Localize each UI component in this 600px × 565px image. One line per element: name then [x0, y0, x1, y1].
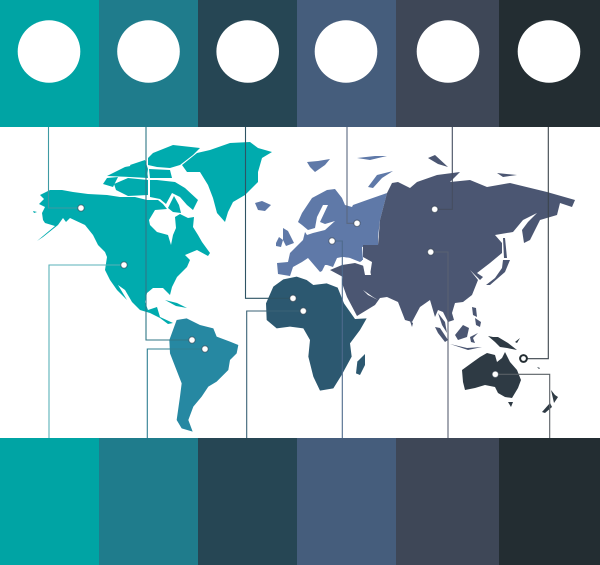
- connector lines: top: [48, 127, 548, 359]
- white placeholder circles: [18, 20, 580, 83]
- top colour band: [0, 0, 600, 127]
- map: Oceania: [462, 336, 558, 413]
- map: Asia: [330, 155, 575, 350]
- Black Sea: [336, 257, 354, 267]
- map: South America: [169, 318, 238, 432]
- Caspian Sea: [362, 260, 371, 275]
- Persian Gulf: [363, 290, 378, 300]
- map: Europe: [255, 156, 393, 276]
- map: Africa: [266, 277, 367, 391]
- map: North America: [33, 142, 272, 324]
- connector lines: bottom: [49, 241, 550, 438]
- ring marker: [520, 355, 527, 362]
- bottom colour band: [0, 438, 600, 565]
- location markers: [78, 205, 499, 377]
